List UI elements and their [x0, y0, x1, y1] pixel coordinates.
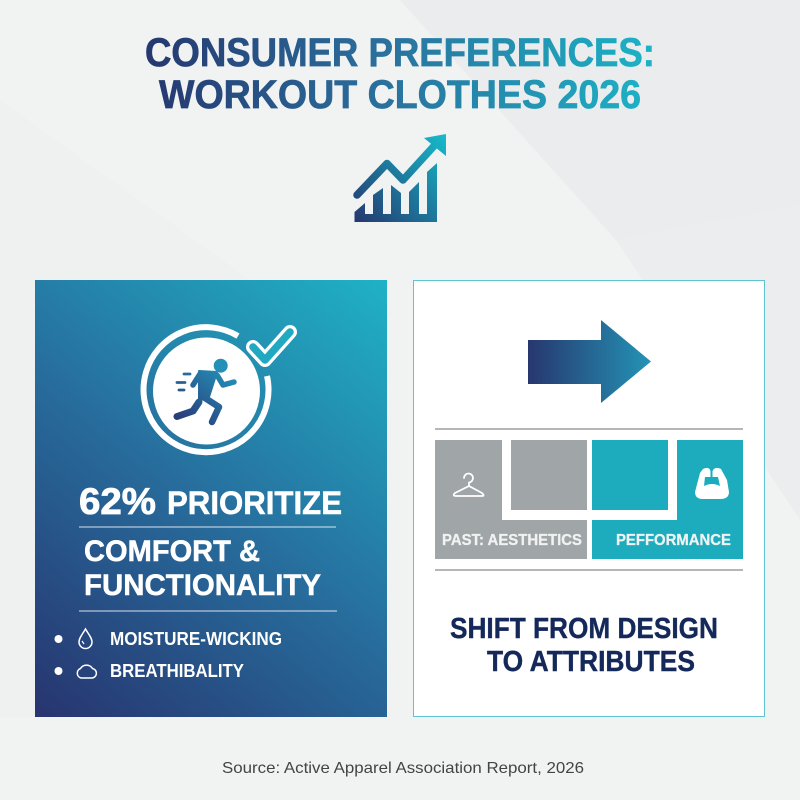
headline: 62% prioritize: PRIORITIZE: [167, 485, 342, 521]
icon: runner with checkmark: [144, 327, 290, 452]
source: Source: Active Apparel Association Report, 2026: [222, 760, 584, 777]
panel: comfort and functionality: [35, 280, 387, 717]
arrow: [528, 320, 651, 403]
text: shift from design to attributes: [450, 613, 718, 678]
text: comfort and functionality: FUNCTIONALITY: [84, 569, 321, 602]
text: comfort and functionality: COMFORT &: [84, 535, 260, 568]
icon: hanger: [454, 474, 484, 496]
bullet: moisture-wicking: MOISTURE-WICKING: [110, 629, 282, 649]
text: shift from design to attributes: SHIFT FROM DESIGN: [450, 613, 718, 645]
headline: 62% prioritize: [79, 481, 342, 522]
block: performance: PEFFORMANCE: [616, 532, 731, 549]
block: performance: [592, 440, 743, 559]
title: CONSUMER PREFERENCES:: [145, 31, 655, 75]
icon: rising chart: [354, 134, 446, 222]
text: comfort and functionality: [84, 535, 321, 602]
icon: muscle: [695, 468, 729, 499]
block: past aesthetics: PAST: AESTHETICS: [442, 532, 582, 549]
bullet: breathability: [54, 661, 244, 681]
panel: shift from design to attributes: [414, 280, 764, 716]
block: past aesthetics: [435, 440, 587, 559]
bullet: breathability: BREATHIBALITY: [110, 661, 244, 681]
headline: 62% prioritize: 62%: [79, 481, 156, 522]
title: WORKOUT CLOTHES 2026: [159, 73, 641, 117]
title: [145, 31, 655, 117]
text: shift from design to attributes: TO ATTRIBUTES: [487, 646, 695, 678]
